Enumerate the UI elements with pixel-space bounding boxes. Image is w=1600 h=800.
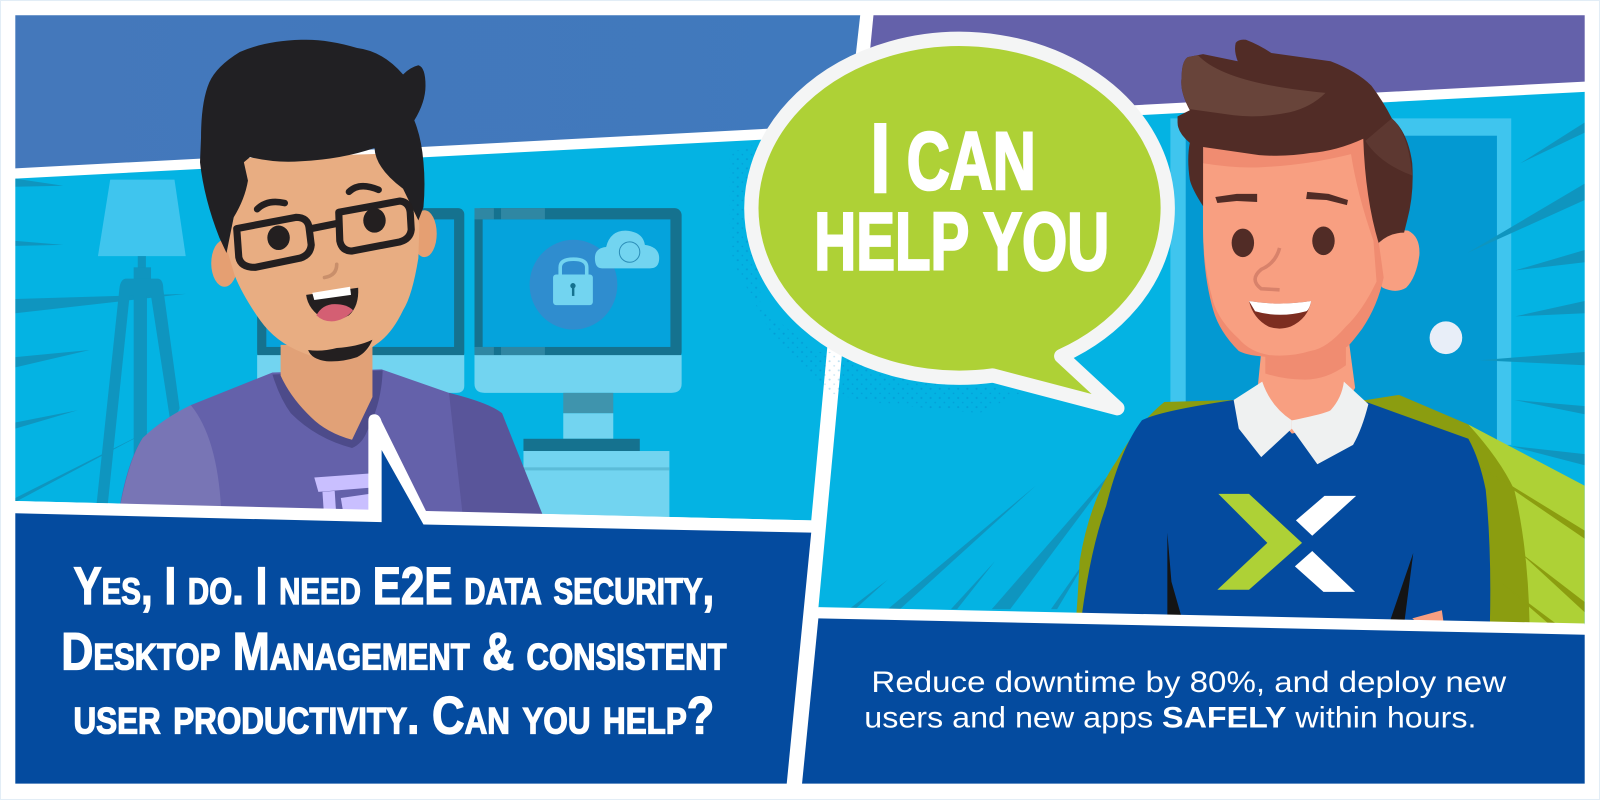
face	[1203, 133, 1384, 357]
speech tail outline	[368, 414, 432, 529]
right room scene	[849, 118, 1585, 628]
panel: right caption	[802, 618, 1585, 784]
caption text: left: user productivity. Can you help?	[73, 687, 714, 746]
sweater folds	[1167, 533, 1413, 624]
nose	[1255, 248, 1280, 290]
character: left man	[118, 40, 545, 522]
panel: top-right purple strip	[863, 15, 1585, 119]
monitor: left	[257, 208, 464, 393]
cabinet	[523, 451, 669, 522]
hand	[1412, 610, 1444, 620]
eyebrows	[257, 186, 379, 209]
bubble text: CAN	[890, 116, 1036, 207]
nose	[324, 264, 337, 278]
smile	[1249, 301, 1311, 329]
caption text: right: Reduce downtime by 80%, and deploy new	[871, 666, 1507, 699]
icon: cloud	[595, 231, 659, 268]
goatee	[308, 340, 372, 361]
panel: left caption	[15, 450, 811, 784]
sweater logo	[1217, 494, 1356, 592]
ears	[211, 240, 238, 287]
left room scene	[15, 179, 682, 522]
panel: left room background	[15, 135, 847, 520]
caption text: left: Desktop Management & consistent	[61, 622, 727, 681]
caption text: right: users and new apps SAFELY within hours.	[864, 702, 1477, 735]
chair	[1076, 395, 1585, 628]
collar	[1234, 382, 1368, 464]
mouth	[306, 287, 358, 321]
bubble text: HELP YOU	[814, 196, 1109, 287]
neck	[1257, 342, 1355, 434]
monitor: right with stand	[474, 208, 682, 451]
gutter: white strip under right scene	[818, 607, 1585, 637]
character: right man	[1178, 40, 1419, 592]
speed lines right	[849, 122, 1585, 609]
shirt emblem	[314, 473, 369, 522]
sweater	[1081, 400, 1490, 628]
panel: right room background	[818, 92, 1585, 624]
panel: top-left blue strip	[15, 15, 860, 168]
eyebrows	[1215, 192, 1348, 205]
icon: padlock	[530, 240, 617, 330]
speech bubble	[751, 39, 1168, 408]
caption text: right	[864, 666, 1507, 735]
halftone dots	[730, 143, 1020, 413]
glasses	[237, 201, 411, 267]
door	[1170, 118, 1511, 445]
gutter: white strip under left scene	[15, 501, 811, 534]
bubble text: I	[870, 103, 890, 213]
neck	[281, 345, 372, 440]
bubble text	[814, 103, 1109, 287]
shirt	[118, 369, 545, 522]
floor lamp	[96, 180, 186, 510]
caption text: left: Yes, I do. I need E2E data security,	[73, 557, 714, 616]
hair	[200, 40, 426, 253]
ear	[1372, 230, 1419, 291]
caption text: left	[61, 557, 727, 746]
hair	[1178, 40, 1413, 243]
eyes	[267, 208, 386, 250]
speed lines left	[15, 179, 186, 502]
eyes	[1232, 227, 1335, 257]
face	[227, 153, 419, 359]
